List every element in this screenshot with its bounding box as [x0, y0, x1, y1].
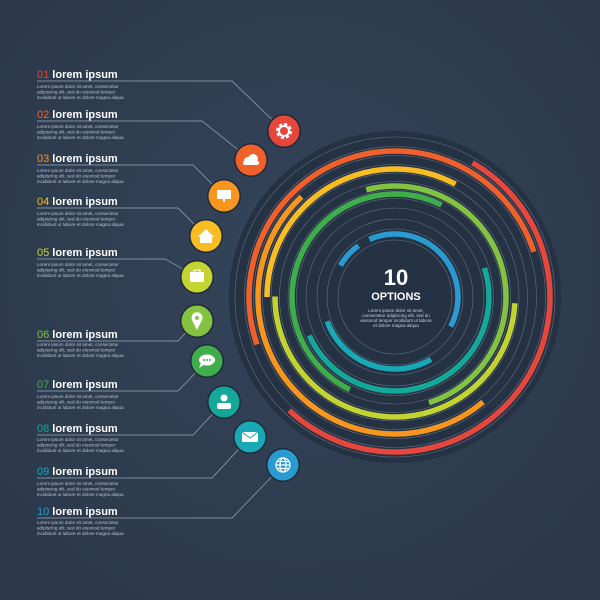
text: incididunt ut labore et dolore magna aliqua [37, 531, 124, 536]
text: Lorem ipsum dolor sit amet, consectetur [37, 342, 119, 347]
items text: 08 lorem ipsum [37, 423, 118, 435]
text: Lorem ipsum dolor sit amet, consectetur [37, 394, 119, 399]
center text [360, 265, 432, 328]
text: adipiscing elit, sed do eiusmod tempor [37, 130, 116, 134]
text: Lorem ipsum dolor sit amet, consectetur [37, 520, 119, 525]
text: Lorem ipsum dolor sit amet, consectetur [37, 437, 119, 442]
text: incididunt ut labore et dolore magna aliqua [37, 179, 124, 184]
connector lines [37, 81, 284, 518]
text: adipiscing elit, sed do eiusmod tempor [37, 486, 116, 492]
center text: et dolore magna aliqua [373, 323, 419, 328]
items text: 07 lorem ipsum [37, 379, 118, 391]
center text: OPTIONS [371, 291, 421, 303]
text: adipiscing elit, sed do eiusmod tempor [37, 216, 116, 222]
center text: Lorem ipsum dolor sit amet, [368, 308, 424, 313]
icons [180, 114, 301, 482]
center text: 10 [384, 265, 408, 290]
text: Lorem ipsum dolor sit amet, consectetur [37, 168, 119, 173]
text: incididunt ut labore et dolore magna aliqua [37, 448, 124, 453]
text: adipiscing elit, sed do eiusmod tempor [37, 268, 116, 272]
items text: 04 lorem ipsum [37, 196, 118, 208]
text: adipiscing elit, sed do eiusmod tempor [37, 348, 116, 352]
items text: 01 lorem ipsum [37, 69, 118, 81]
items text [37, 69, 118, 518]
text: adipiscing elit, sed do eiusmod tempor [37, 90, 116, 94]
text: adipiscing elit, sed do eiusmod tempor [37, 174, 116, 178]
items text: 06 lorem ipsum [37, 329, 118, 341]
text: incididunt ut labore et dolore magna aliqua [37, 95, 124, 100]
text: incididunt ut labore et dolore magna aliqua [37, 273, 124, 278]
text: Lorem ipsum dolor sit amet, consectetur [37, 481, 119, 486]
text: incididunt ut labore et dolore magna aliqua [37, 353, 124, 358]
chart: circular rings [183, 85, 600, 509]
items text: 05 lorem ipsum [37, 247, 118, 259]
center text: eiusmod tempor incididunt ut labore [360, 318, 432, 323]
text: incididunt ut labore et dolore magna aliqua [37, 135, 124, 140]
items text: 09 lorem ipsum [37, 466, 118, 478]
text: incididunt ut labore et dolore magna aliqua [37, 222, 124, 227]
items text: 10 lorem ipsum [37, 506, 118, 518]
items text: 03 lorem ipsum [37, 153, 118, 165]
text: Lorem ipsum dolor sit amet, consectetur [37, 84, 119, 89]
text: adipiscing elit, sed do eiusmod tempor [37, 526, 116, 530]
text: Lorem ipsum dolor sit amet, consectetur [37, 262, 119, 267]
center text: consectetur adipiscing elit, sed do [362, 313, 430, 318]
items text: 02 lorem ipsum [37, 109, 118, 121]
text: adipiscing elit, sed do eiusmod tempor [37, 400, 116, 404]
text: Lorem ipsum dolor sit amet, consectetur [37, 124, 119, 129]
text: incididunt ut labore et dolore magna aliqua [37, 405, 124, 410]
text: adipiscing elit, sed do eiusmod tempor [37, 442, 116, 448]
text: incididunt ut labore et dolore magna aliqua [37, 492, 124, 497]
text: Lorem ipsum dolor sit amet, consectetur [37, 211, 119, 216]
